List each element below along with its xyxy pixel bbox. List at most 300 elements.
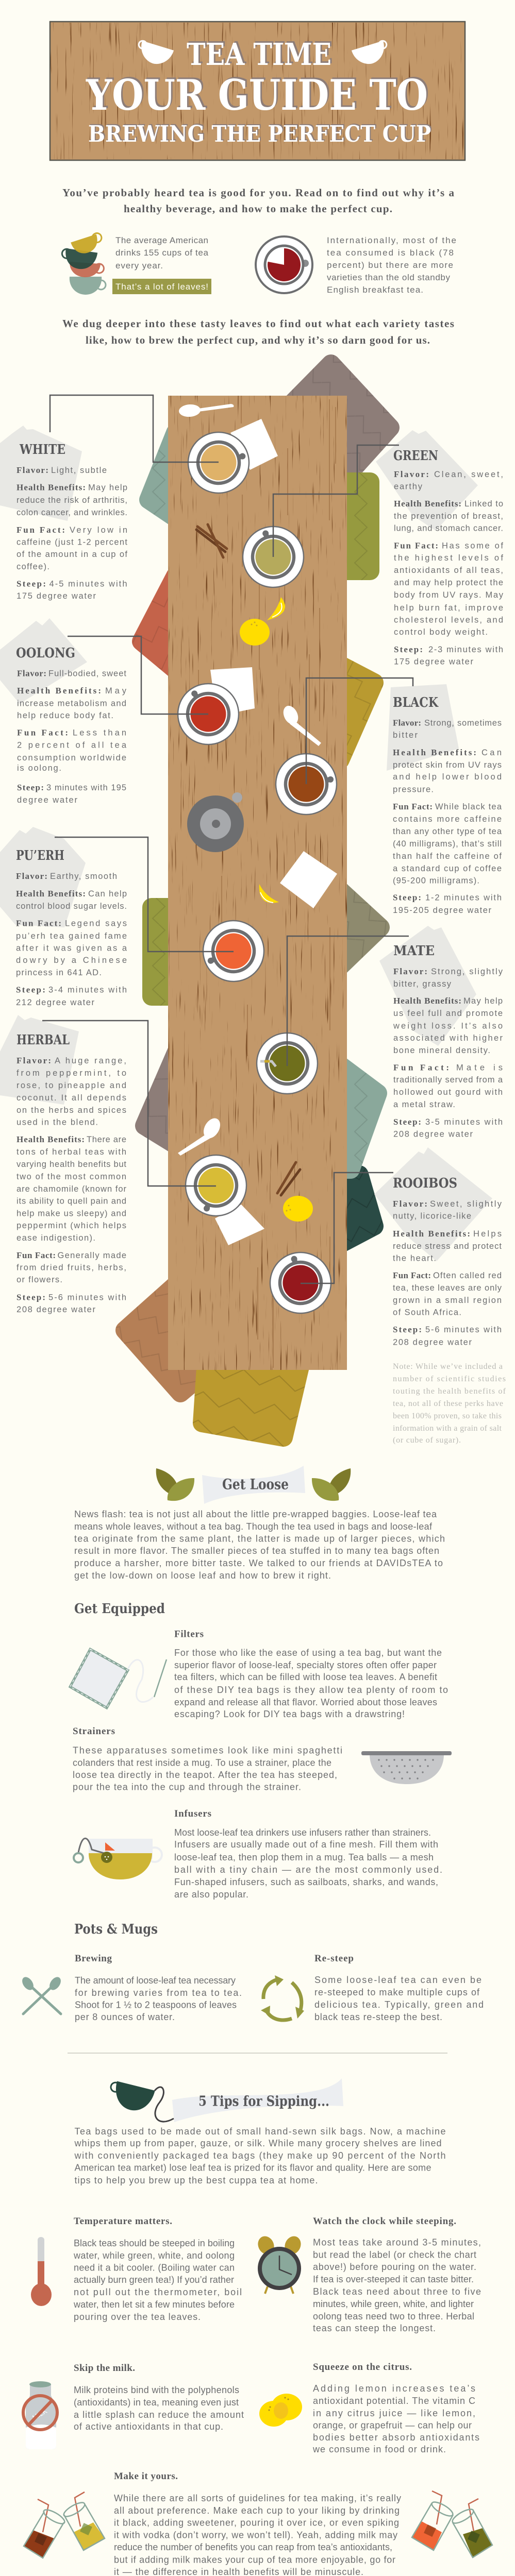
fun fact: hollowed out gourd with [393,1088,503,1097]
flavor: Flavor: [17,669,46,678]
fun fact: Fun Fact: [393,1270,431,1280]
placemats behind table [125,364,390,1437]
cup: black tea [271,749,342,820]
text: skip the milk [74,2363,244,2432]
tag: mate [379,926,476,1046]
health benefits [16,889,127,911]
steep [394,645,503,667]
fun fact: 2 percent of all tea [17,741,127,750]
icon: strainer [361,1751,452,1784]
fun fact [16,919,127,977]
health benefits: Health Benefits: [393,1229,470,1239]
fun fact: after it was given as a [16,944,127,953]
flavor: on the herbs and spices [16,1106,126,1115]
intro text: healthy beverage, and how to make the perfect cup. [124,202,392,215]
spoon two [280,703,321,746]
note on studies: tea, not all of these perks have [393,1399,503,1408]
text: temperature matters [73,2216,242,2322]
heading: herbal: HERBAL [16,1032,70,1048]
text: get loose intro: get the low-down on loose leaf and how to brew it right. [74,1570,331,1581]
fun fact: While black tea [435,802,502,811]
steep: Steep: [393,1325,422,1334]
health benefits: bone mineral density. [393,1046,490,1055]
fun fact: Less than [73,728,126,738]
steep: 1-2 minutes with [425,893,502,902]
stat: cups per year [115,235,209,270]
icon: glasses left [24,2492,105,2558]
lemon wedge two [259,884,279,903]
text: get loose intro: result in more flavor. The smaller pieces of tea stuffed in to many tea bags often [74,1546,439,1556]
stat: black tea share: varieties than the old standby [327,273,451,282]
stat: black tea share: percent) but there are more [327,260,453,270]
flavor: Sweet, slightly [430,1199,502,1209]
health benefits: Helps [473,1229,502,1239]
heading: rooibos: ROOIBOS [393,1176,457,1191]
title text: BREWING THE PERFECT CUP [88,121,431,147]
steep: Steep: [393,892,421,902]
flavor [393,1199,502,1221]
text: re-steep: re-steeped to make multiple cups of [314,1987,480,1997]
title text: YOUR GUIDE TO [86,71,428,120]
flavor [16,1056,126,1127]
napkin four [215,1205,264,1245]
health benefits: the prevention of breast, [394,512,503,521]
flavor: used in the blend. [16,1118,98,1127]
fun fact: body from UV rays. May [394,590,504,600]
icon: black tea pie cup [256,236,312,293]
lemon two [283,1196,313,1222]
callout: lot of leaves: That’s a lot of leaves! [115,282,208,292]
steep: 212 degree water [16,998,95,1007]
stat: black tea share: tea consumed is black (78 [327,248,454,258]
text: watch the clock: Most teas take around 3-5 minutes, [313,2238,481,2248]
heading: mate: MATE [393,943,435,959]
steep: 208 degree water [393,1338,472,1347]
text: filters: expand and release all that flavor. Worried about those leaves [174,1697,437,1707]
steep [16,579,127,601]
fun fact: (95-200 milligrams). [393,876,479,886]
cinnamon one [196,524,227,557]
health benefits: are chamomile (known for [16,1184,127,1194]
health benefits: ease indigestion). [16,1233,95,1243]
health benefits: weight loss. It’s also [393,1021,503,1030]
fun fact: help burn fat, improve [394,603,503,613]
health benefits: help reduce body fat. [17,711,113,720]
health benefits: May help [463,996,503,1006]
flavor: rose, to pineapple and [16,1081,126,1090]
icon: stacked cups [60,232,106,295]
heading: black: BLACK [393,695,439,710]
heading: 5 tips [107,2078,343,2122]
flavor: nutty, licorice-like [393,1212,471,1221]
health benefits [17,686,127,720]
steep: Steep: [16,985,45,994]
text: brewing [75,1953,242,2022]
panel: pu'erh tea [16,848,127,1007]
health benefits: peppermint (which helps [16,1221,126,1230]
title text: TEA TIME [187,37,331,72]
steep [16,1293,126,1314]
flavor: Flavor: [16,465,48,475]
icon: thermometer [31,2237,52,2306]
health benefits: increase metabolism and [17,699,126,708]
text: strainers: colanders that rest inside a mug. To use a strainer, place the [73,1758,331,1768]
health benefits: There are [87,1135,126,1144]
text: skip the milk: a little splash can reduce the amount [74,2410,244,2420]
cup: green tea [235,519,311,595]
health benefits: Health Benefits: [17,686,101,696]
text: skip the milk: Skip the milk. [74,2363,135,2374]
health benefits: and help lower blood [393,772,502,782]
steep: Steep: [394,645,423,654]
text: infusers [174,1808,442,1900]
flavor: Strong, sometimes [424,718,502,727]
connector lines [42,395,413,1283]
health benefits [16,482,127,517]
stat: cups per year: The average American [115,235,208,245]
text: temperature matters: need it a bit cooler. (Boiling water can [74,2263,235,2273]
string [155,2087,174,2122]
health benefits: reduce stress and protect [393,1242,502,1251]
table props: napkins, spoons, lemons, cinnamon, teapot [178,404,337,1245]
icon: milk bottle crossed out [23,2381,57,2449]
steep: Steep: [17,783,44,792]
fun fact: Fun Fact: [16,525,65,535]
text: re-steep: Re-steep [314,1953,354,1964]
icon: right leaves [312,1468,351,1501]
title text: TEA TIME [188,35,333,71]
cup: rooibos tea [263,1246,338,1320]
text: get loose intro: tea originate from the same plant, the latter is made up of larger pieces, which [74,1534,445,1544]
flavor: Full-bodied, sweet [48,669,126,678]
flavor [394,469,503,492]
flavor: earthy [394,482,423,492]
text: temperature matters: Black teas should be steeped in boiling [74,2238,235,2248]
health benefits: Health Benefits: [16,482,86,493]
flavor: Flavor: [393,1199,427,1209]
napkin one [230,419,278,470]
stat: black tea share [327,235,456,295]
text: strainers: Strainers [73,1726,115,1737]
text: squeeze on the citrus: we consume in food or drink. [312,2444,446,2454]
text: watch the clock [313,2216,481,2333]
title text [86,35,432,147]
fun fact: or flowers. [16,1275,62,1284]
steep: 195-205 degree water [393,906,492,915]
text: infusers: Infusers [174,1808,211,1819]
fun fact: Fun Fact: [393,802,433,811]
fun fact: Fun Fact: [394,541,438,550]
fun fact: princess in 641 AD. [16,968,102,977]
text: strainers: These apparatuses sometimes look like mini spaghetti [73,1745,342,1756]
text: re-steep: black teas re-steep the best. [314,2012,442,2022]
health benefits: varying health benefits but [16,1160,126,1169]
stat: cups per year: drinks 155 cups of tea [115,248,209,258]
lemon wedge one [267,597,285,620]
tag: white [0,426,82,521]
title text: BREWING THE PERFECT CUP [89,120,432,146]
heading: green: GREEN [393,448,438,464]
text: temperature matters: not pull out the thermometer, boil [74,2287,242,2297]
fun fact [393,1063,503,1109]
health benefits: control blood sugar levels. [16,902,127,911]
text: tips intro [74,2126,445,2185]
flavor: Flavor: [16,1056,51,1065]
callout: lot of leaves [112,279,211,294]
text: make it yours [114,2471,401,2576]
health benefits: pressure. [393,785,434,794]
flavor: Strong, slightly [431,967,503,976]
text: re-steep: delicious tea. Typically, green and [314,1999,484,2010]
text: squeeze on the citrus: orange, or grapefruit — can help our [313,2420,472,2431]
note on studies: information with a grain of salt [393,1424,502,1433]
fun fact: a metal straw. [393,1100,455,1109]
steep: 208 degree water [16,1305,96,1314]
steep: degree water [17,795,77,805]
text: get loose intro: News flash: tea is not just all about the little pre-wrapped baggies. Loose-leaf tea [74,1509,437,1519]
text: get loose intro: produce a harsher, more bitter taste. We talked to our friends at DAVIDsTEA to [74,1558,443,1568]
panel: green tea [393,448,504,667]
tag: green [376,430,478,531]
icon: infuser in mug [74,1838,162,1879]
fun fact: from dried fruits, herbs, [16,1263,126,1273]
icon: left leaves [156,1468,194,1501]
fun fact: Generally made [58,1251,126,1260]
text: watch the clock: Watch the clock while steeping. [313,2216,456,2227]
flavor: bitter [393,731,418,740]
text: watch the clock: above!) before pouring on the water. [313,2262,476,2272]
heading: pots and mugs: Pots & Mugs [74,1922,158,1937]
text: tips intro: whips them up from paper, gauze, or silk. While many grocery shelves are lined [74,2138,442,2148]
text: tips intro: American tea market) lose leaf tea is prized for its flavor and quality. Here are some [74,2163,431,2173]
fun fact [16,1250,126,1284]
cinnamon two [277,1162,300,1195]
wooden table [168,396,347,1370]
text: make it yours: While there are all sorts of guidelines for tea making, it’s really [114,2493,401,2503]
cup: oolong tea [166,672,251,756]
fun fact: Has some of [442,541,503,550]
health benefits [393,1229,502,1263]
steep: 3 minutes with 195 [46,783,126,792]
text: watch the clock: oolong teas need two to three. Herbal [313,2311,474,2321]
text: squeeze on the citrus: Adding lemon increases tea’s [313,2383,475,2394]
text: strainers [73,1726,342,1792]
text: strainers: loose tea directly in the teapot. After the tea has steeped, [73,1770,337,1780]
fun fact: contains more caffeine [393,815,502,824]
flavor: Light, subtle [51,466,107,475]
text: filters: For those who like the ease of using a tea bag, but want the [174,1648,442,1658]
text: filters: superior flavor of loose-leaf, specialty stores often offer paper [174,1660,437,1670]
note on studies: number of scientific studies [393,1375,506,1383]
steep [16,985,127,1007]
health benefits: us feel full and promote [393,1009,503,1018]
flavor: from peppermint, to [16,1069,126,1078]
text: brewing: for brewing varies from tea to tea. [75,1988,242,1998]
heading: oolong: OOLONG [16,646,75,661]
flavor: Flavor: [393,967,427,976]
fun fact: Fun Fact: [16,1250,56,1260]
health benefits: reduce the risk of arthritis, [16,496,127,505]
tag: rooibos [374,1147,492,1261]
note on studies: touting the health benefits of [393,1387,506,1396]
fun fact: Legend says [65,919,127,928]
fun fact: consumption worldwide [17,753,126,762]
title banner [50,22,465,160]
intro text two: like, how to brew the perfect cup, and why it’s so darn good for us. [86,334,430,346]
fun fact: dowry by a Chinese [16,956,127,965]
text: squeeze on the citrus [312,2362,479,2454]
fun fact: traditionally served from a [393,1075,503,1084]
tag: herbal [0,1015,79,1105]
steep: 4-5 minutes with [49,579,127,588]
text: make it yours: it black, adding sweetener, pouring it over ice, or even spiking [114,2517,399,2528]
cup: pu'erh tea [194,911,273,991]
text: brewing: per 8 ounces of water. [75,2012,175,2022]
flavor [16,871,117,881]
health benefits [16,1134,127,1243]
text: tips intro: Tea bags used to be made out of small hand-sewn silk bags. Now, a machine [74,2126,445,2137]
health benefits: tons of herbal teas with [16,1147,126,1157]
steep [393,1117,503,1139]
icon: lemons [259,2394,302,2427]
fun fact [394,541,504,637]
icon: left cup [135,40,174,68]
fun fact [16,525,127,571]
health benefits: Health Benefits: [394,499,461,509]
icon: alarm clock [255,2233,304,2294]
text: infusers: are also popular. [174,1889,248,1900]
steep: 5-6 minutes with [48,1293,126,1302]
text: tips intro: tips to help you brew up the best cuppa tea at home. [74,2175,318,2185]
steep: 3-5 minutes with [425,1117,503,1127]
text: squeeze on the citrus: antioxidant potential. The vitamin C [313,2396,475,2406]
fun fact: caffeine (just 1-2 percent [16,538,127,547]
text: temperature matters: pouring over the tea leaves. [74,2312,201,2322]
lemon one [240,619,270,646]
text: skip the milk: Milk proteins bind with the polyphenols [74,2385,239,2395]
health benefits [393,748,502,794]
health benefits: the heart. [393,1254,436,1263]
fun fact: cholesterol levels, and [394,615,503,624]
fun fact: control body weight. [394,628,488,637]
fun fact: of South Africa. [393,1308,461,1317]
text: infusers: Infusers are usually made out of a fine mesh. Fill them with [174,1839,438,1850]
health benefits: associated with higher [393,1033,503,1043]
title text: YOUR GUIDE TO [87,70,429,118]
icon: right cup [352,40,391,68]
text: brewing: Brewing [75,1953,112,1964]
text: watch the clock: If tea is over-steeped it can taste bitter. [313,2274,474,2284]
fun fact: is oolong. [17,764,61,773]
cup: white tea [181,426,256,500]
text: make it yours: reduce the number of benefits you can reap from tea’s antioxidants, [114,2542,392,2552]
stat: cups per year: every year. [115,261,163,270]
text: make it yours: Make it yours. [114,2471,178,2482]
cup: mate tea [257,1033,318,1094]
steep: 175 degree water [16,591,96,601]
text: tips intro: with conveniently packaged tea bags (they make up 90 percent of the North [74,2150,445,2161]
text: skip the milk: of active antioxidants in that cup. [74,2421,223,2432]
fun fact: grown in a small region [393,1296,502,1305]
tag: oolong [0,618,87,704]
fun fact: and may help protect the [394,578,503,587]
health benefits: help make us sleepy) and [16,1209,126,1218]
intro text [62,187,455,215]
heading: get equipped: Get Equipped [74,1601,165,1617]
text: make it yours: it with vodka (don’t worry, we won’t tell). Yeah, adding milk may [114,2530,397,2540]
text: squeeze on the citrus: bodies better absorb antioxidants [313,2432,479,2443]
fun fact: Fun Fact: [16,919,61,928]
steep: 208 degree water [393,1129,473,1139]
fun fact [17,727,127,773]
icon: crossed spoons [20,1975,63,2014]
text: watch the clock: Black teas need about three to five [313,2286,481,2297]
text: get loose intro: means whole leaves, without a tea bag. Though the tea used in bags and loose-leaf [74,1521,433,1532]
panel: mate tea [393,943,503,1139]
napkin two [210,667,255,716]
note on studies: been 100% proven, so take this [393,1412,502,1420]
flavor: coconut. It all depends [16,1093,126,1103]
icon: dark tea cup [107,2080,155,2114]
flavor: bitter, grassy [393,979,452,989]
fun fact: than any other type of tea [393,827,502,836]
text: infusers: Fun-shaped infusers, such as sailboats, sharks, and wands, [174,1877,438,1887]
text: infusers: Most loose-leaf tea drinkers use infusers rather than strainers. [174,1827,431,1838]
fun fact [393,802,502,886]
heading: white: WHITE [19,442,65,457]
text: filters: of these DIY tea bags is they allow tea plenty of room to [174,1685,448,1695]
tag: black [387,684,459,771]
text: squeeze on the citrus: Squeeze on the citrus. [313,2362,412,2372]
health benefits: Health Benefits: [393,996,461,1006]
flavor: A huge range, [55,1056,126,1065]
text: filters: Filters [174,1629,204,1639]
steep: Steep: [16,579,46,588]
health benefits [393,996,503,1055]
text: squeeze on the citrus: in any citrus juice — like lemon, [313,2408,475,2418]
heading text: Get Loose [222,1476,289,1493]
text: watch the clock: but read the label (or check the chart [313,2249,476,2260]
text: infusers: ball with a tiny chain — are the most commonly used. [174,1865,442,1875]
text: temperature matters: water, then let sit a few minutes before [73,2299,235,2310]
text: temperature matters: actually burn green tea!) If you’d rather [74,2275,234,2285]
napkin three [280,851,337,908]
flavor: Flavor: [393,718,421,727]
note on studies [393,1362,506,1445]
stat: black tea share: English breakfast tea. [327,285,423,295]
fun fact: Often called red [433,1271,502,1280]
steep: Steep: [393,1117,421,1127]
text: brewing: Shoot for 1 ½ to 2 teaspoons of leaves [75,2000,237,2010]
fun fact: coffee). [16,562,49,571]
text: temperature matters: Temperature matters. [74,2216,172,2227]
flavor: Earthy, smooth [50,872,117,881]
stat: black tea share: Internationally, most of the [327,235,456,245]
text: strainers: pour the tea into the cup and through the strainer. [73,1782,301,1792]
fun fact [393,1270,502,1317]
note on studies: (or cube of sugar). [393,1436,461,1445]
text: re-steep: Some loose-leaf tea can even be [314,1975,481,1985]
fun fact: the highest levels of [394,553,503,563]
text: make it yours: all about preference. Make each cup to your liking by drinking [114,2505,400,2516]
icon: tea bag filter [70,1649,167,1708]
fun fact: antioxidants of all teas, [394,566,503,575]
health benefits [394,499,503,533]
text: filters: escaping? Look for DIY tea bags with a drawstring! [174,1709,405,1719]
health benefits: lung, and stomach cancer. [394,523,503,533]
banner ribbon [202,1466,305,1504]
icon: re-steep arrows [261,1975,304,2020]
